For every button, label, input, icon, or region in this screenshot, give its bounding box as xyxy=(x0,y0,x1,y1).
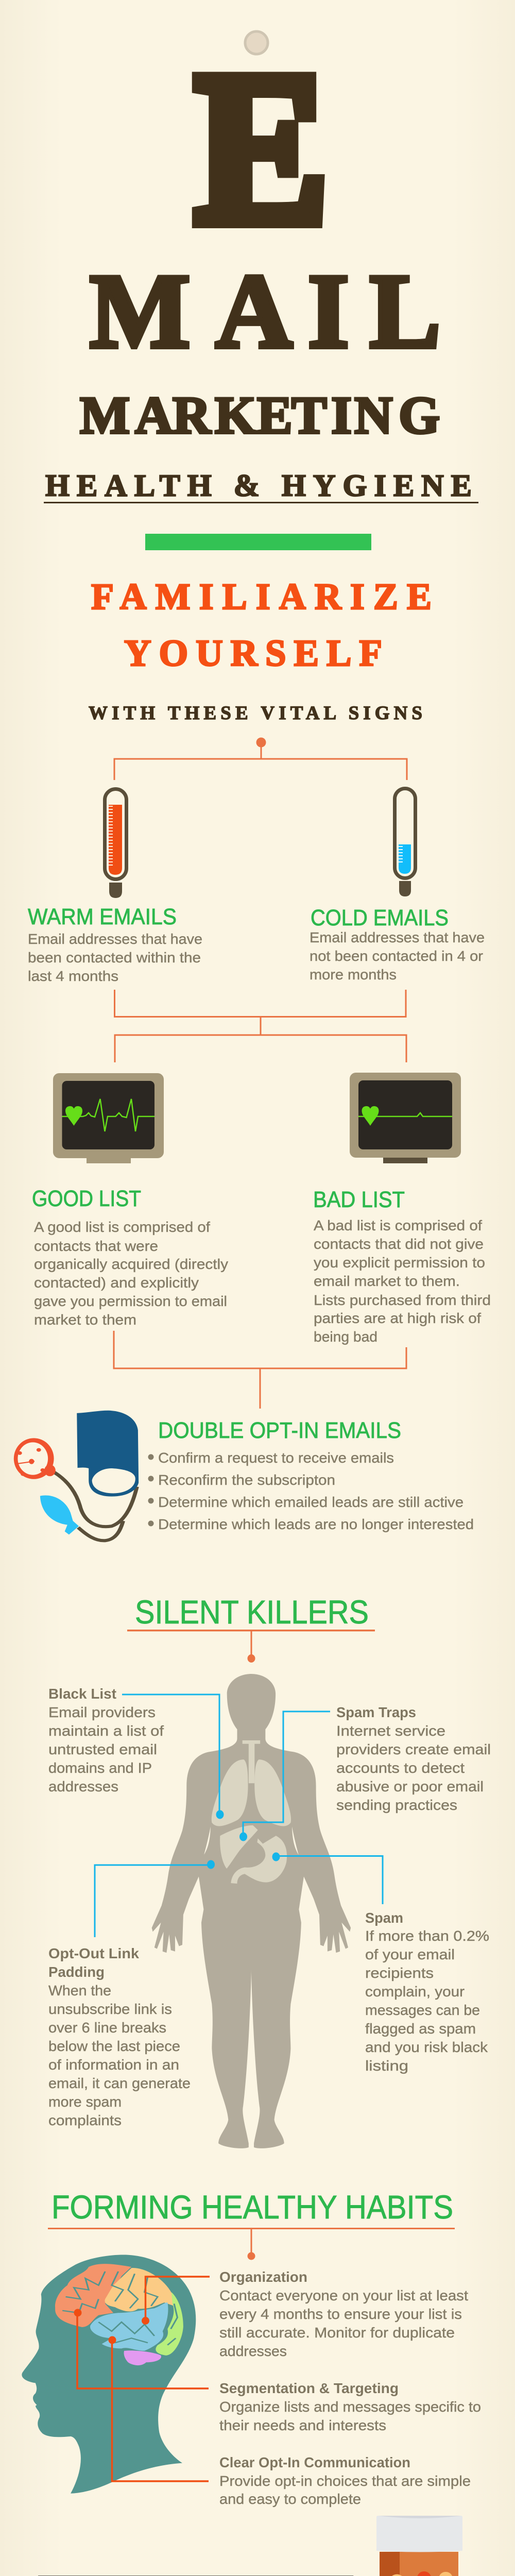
text block: warm emails: been contacted within the xyxy=(28,950,201,965)
text block: clear opt-in communication xyxy=(219,2454,471,2507)
body: left half xyxy=(152,1674,252,2148)
callout: opt-out link padding: email, it can generate xyxy=(48,2075,191,2091)
callout: spam: and you risk black xyxy=(365,2039,488,2055)
icon: head with brain xyxy=(22,2255,196,2494)
text block: good list: market to them xyxy=(34,1312,136,1328)
callout: spam traps xyxy=(239,1704,491,1841)
callout: black list: maintain a list of xyxy=(48,1723,164,1739)
callout: spam: Spam xyxy=(365,1910,403,1926)
heading: silent killers xyxy=(127,1594,375,1663)
text block: organization xyxy=(219,2269,468,2359)
text block: double opt-in emails: Reconfirm the subscripton xyxy=(158,1472,335,1488)
callout: spam: If more than 0.2% xyxy=(365,1928,489,1944)
text block: cold emails: COLD EMAILS xyxy=(311,905,449,930)
text block: bad list: A bad list is comprised of xyxy=(314,1217,482,1233)
text block: warm emails: Email addresses that have xyxy=(28,931,202,947)
callout: spam: complain, your xyxy=(365,1984,465,1999)
text block: bad list: parties are at high risk of xyxy=(314,1310,481,1326)
text block: segmentation and targeting: their needs and interests xyxy=(219,2417,386,2433)
bottle cap xyxy=(376,2516,462,2552)
icon: bad list heart monitor xyxy=(350,1073,461,1163)
text block: organization: Contact everyone on your list at least xyxy=(219,2287,468,2303)
text block: bad list: BAD LIST xyxy=(313,1187,405,1212)
green divider bar xyxy=(145,534,371,550)
text block: cold emails: not been contacted in 4 or xyxy=(310,948,483,964)
callout: opt-out link padding: unsubscribe link is xyxy=(48,2001,172,2017)
text block: double opt-in emails xyxy=(148,1418,474,1532)
callout: opt-out link padding: of information in an xyxy=(48,2057,179,2073)
text block: cold emails: Email addresses that have xyxy=(310,929,485,945)
callout: spam: recipients xyxy=(365,1965,434,1981)
text block: clear opt-in communication: Clear Opt-In Communication xyxy=(219,2454,410,2470)
callout: opt-out link padding: more spam xyxy=(48,2094,122,2110)
text block: bad list: being bad xyxy=(314,1329,377,1345)
heading: silent killers: SILENT KILLERS xyxy=(135,1594,369,1631)
text block: cold emails: more months xyxy=(310,967,397,982)
callout: spam: of your email xyxy=(365,1946,455,1962)
callout: black list: untrusted email xyxy=(48,1741,157,1757)
text block: cold emails xyxy=(310,905,485,982)
callout: black list: Email providers xyxy=(48,1704,156,1720)
text block: double opt-in emails: DOUBLE OPT-IN EMAILS xyxy=(158,1418,401,1443)
text block: organization: addresses xyxy=(219,2343,287,2359)
callout: spam traps: Spam Traps xyxy=(336,1704,416,1720)
callout: black list: Black List xyxy=(48,1686,116,1702)
text block: good list: A good list is comprised of xyxy=(34,1219,210,1235)
text block: double opt-in emails: Determine which leads are no longer interested xyxy=(158,1516,474,1532)
icon: blood pressure cuff xyxy=(14,1411,139,1540)
callout: opt-out link padding: Opt-Out Link xyxy=(48,1945,139,1961)
text block: warm emails: WARM EMAILS xyxy=(28,904,177,929)
text block: good list: GOOD LIST xyxy=(32,1186,141,1211)
callout: opt-out link padding: below the last piece xyxy=(48,2038,180,2054)
text block: good list: gave you permission to email xyxy=(34,1293,227,1309)
callout: spam traps: accounts to detect xyxy=(336,1760,465,1776)
icon: prescription bottle xyxy=(376,2516,462,2576)
callout: black list xyxy=(48,1686,224,1819)
text block: double opt-in emails: Determine which emailed leads are still active xyxy=(158,1494,464,1510)
heading: familiarize yourself xyxy=(91,576,432,674)
callout: opt-out link padding: Padding xyxy=(48,1964,105,1980)
connector: lists to double opt-in xyxy=(114,1331,406,1409)
callout: opt-out link padding: over 6 line breaks xyxy=(48,2020,166,2036)
text block: clear opt-in communication: and easy to complete xyxy=(219,2491,361,2507)
text block: warm emails xyxy=(28,904,202,984)
text block: segmentation and targeting: Segmentation & Targeting xyxy=(219,2380,399,2396)
callout: spam traps: sending practices xyxy=(336,1797,457,1813)
callouts: brain pointer lines xyxy=(74,2277,210,2481)
text block: organization: every 4 months to ensure your list is xyxy=(219,2306,462,2322)
text block: organization: Organization xyxy=(219,2269,307,2285)
connector: vital signs to thermometers xyxy=(114,738,407,780)
callout: spam traps: Internet service xyxy=(336,1723,445,1739)
text block: good list: organically acquired (directly xyxy=(34,1256,228,1272)
callout: black list: addresses xyxy=(48,1778,118,1794)
text block: bad list: you explicit permission to xyxy=(314,1255,485,1270)
callout: spam: flagged as spam xyxy=(365,2021,476,2037)
text block: bad list: Lists purchased from third xyxy=(314,1292,491,1308)
subheading: with these vital signs: WITH THESE VITAL SIGNS xyxy=(89,703,422,724)
heading: forming healthy habits xyxy=(48,2189,455,2260)
pills xyxy=(392,2571,452,2576)
callout: spam: listing xyxy=(365,2058,408,2074)
title word MARKETING: MARKETING xyxy=(80,386,440,445)
callout: spam: messages can be xyxy=(365,2002,480,2018)
text block: clear opt-in communication: Provide opt-in choices that are simple xyxy=(219,2473,471,2489)
callout: spam traps: abusive or poor email xyxy=(336,1778,484,1794)
callout: opt-out link padding xyxy=(48,1860,215,2128)
title word MAIL: MAIL xyxy=(90,252,441,370)
text block: bad list: email market to them. xyxy=(314,1273,460,1289)
text block: double opt-in emails: Confirm a request to receive emails xyxy=(158,1450,394,1466)
body: right half xyxy=(251,1674,351,2148)
text block: segmentation and targeting xyxy=(219,2380,481,2433)
icon: warm thermometer xyxy=(105,789,127,898)
text block: good list xyxy=(32,1186,228,1328)
subtitle health and hygiene: HEALTH & HYGIENE xyxy=(45,469,472,503)
text block: good list: contacted) and explicitly xyxy=(34,1275,199,1291)
callout: opt-out link padding: When the xyxy=(48,1982,111,1998)
organs xyxy=(212,1740,291,1884)
icon: cold thermometer xyxy=(394,788,415,896)
text block: bad list: contacts that did not give xyxy=(314,1236,484,1252)
connector: thermometers to monitors xyxy=(114,990,406,1062)
heading: familiarize yourself: YOURSELF xyxy=(124,632,382,674)
callout: spam xyxy=(272,1853,489,2074)
text block: bad list xyxy=(313,1187,491,1345)
callout: opt-out link padding: complaints xyxy=(48,2112,122,2128)
title letter E: E xyxy=(195,28,328,268)
text block: organization: still accurate. Monitor for duplicate xyxy=(219,2325,455,2341)
eye chart pin xyxy=(245,31,268,54)
text block: segmentation and targeting: Organize lists and messages specific to xyxy=(219,2399,481,2415)
title block xyxy=(45,28,472,503)
bottle body xyxy=(380,2552,458,2576)
text block: warm emails: last 4 months xyxy=(28,968,118,984)
brain regions xyxy=(55,2264,131,2327)
heading: forming healthy habits: FORMING HEALTHY HABITS xyxy=(52,2189,453,2226)
heading: familiarize yourself: FAMILIARIZE xyxy=(91,576,432,617)
callout: black list: domains and IP xyxy=(48,1760,152,1776)
text block: good list: contacts that were xyxy=(34,1238,158,1254)
head silhouette xyxy=(22,2255,196,2494)
icon: good list heart monitor xyxy=(53,1073,164,1163)
brain folds xyxy=(62,2272,177,2345)
callout: spam traps: providers create email xyxy=(336,1741,491,1757)
body silhouette with organs xyxy=(152,1674,351,2148)
